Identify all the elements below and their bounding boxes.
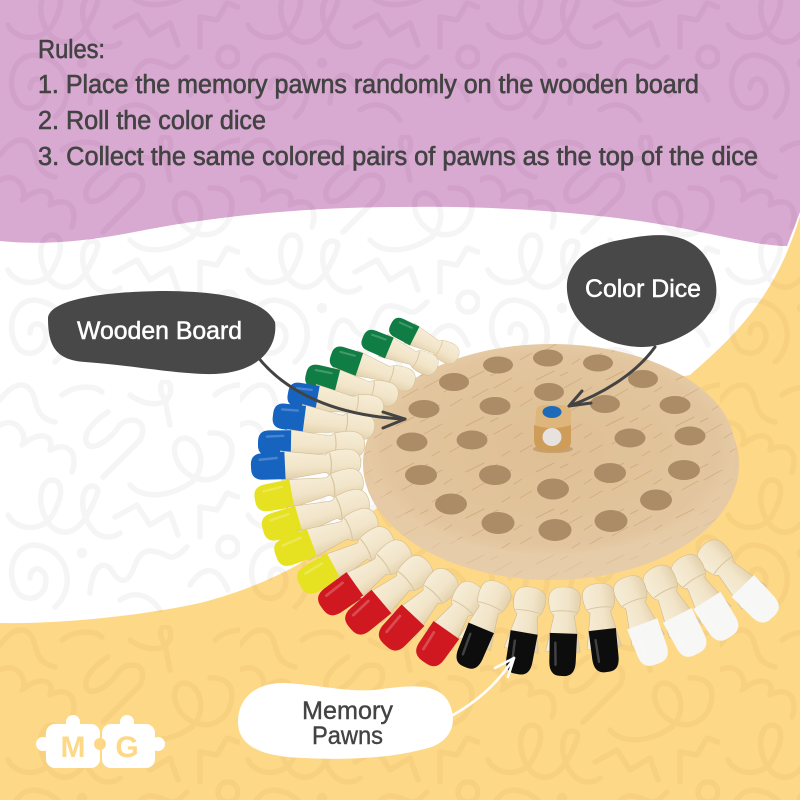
logo: MG puzzle pieces: G bbox=[115, 731, 139, 764]
arrow: memory pawns callout to pawns bbox=[453, 658, 514, 715]
black pawns bbox=[449, 576, 624, 677]
board holes bbox=[396, 350, 706, 541]
white pawns bbox=[609, 534, 785, 670]
arrow: wooden board callout to board bbox=[257, 356, 405, 428]
green pawns bbox=[303, 314, 463, 410]
callout: memory pawns: Pawns bbox=[312, 722, 383, 750]
background: yellow bottom band bbox=[0, 216, 800, 800]
callout: memory pawns bbox=[238, 683, 453, 759]
heading: rules: Rules: bbox=[38, 36, 105, 64]
callout: wooden board: Wooden Board bbox=[77, 317, 242, 345]
rule 1: 1. Place the memory pawns randomly on the wooden board bbox=[38, 71, 699, 99]
arrow: color dice callout to dice bbox=[569, 347, 655, 406]
callout: color dice: Color Dice bbox=[585, 275, 701, 303]
callout: color dice bbox=[567, 235, 716, 347]
yellow pawns bbox=[252, 465, 399, 599]
memory pawns bbox=[250, 314, 785, 677]
logo: MG puzzle pieces: M bbox=[60, 731, 86, 764]
wooden board bbox=[363, 344, 739, 580]
callout: memory pawns: Memory bbox=[302, 697, 393, 725]
icon: color dice bbox=[533, 405, 573, 453]
rules text block bbox=[38, 36, 758, 171]
callout: wooden board bbox=[48, 291, 275, 374]
red pawns bbox=[313, 534, 491, 672]
blue pawns bbox=[250, 380, 386, 482]
rule 3: 3. Collect the same colored pairs of pawns as the top of the dice bbox=[38, 143, 758, 171]
rule 2: 2. Roll the color dice bbox=[38, 107, 266, 135]
logo: MG puzzle pieces bbox=[36, 715, 165, 768]
background: purple rules band bbox=[0, 0, 800, 246]
